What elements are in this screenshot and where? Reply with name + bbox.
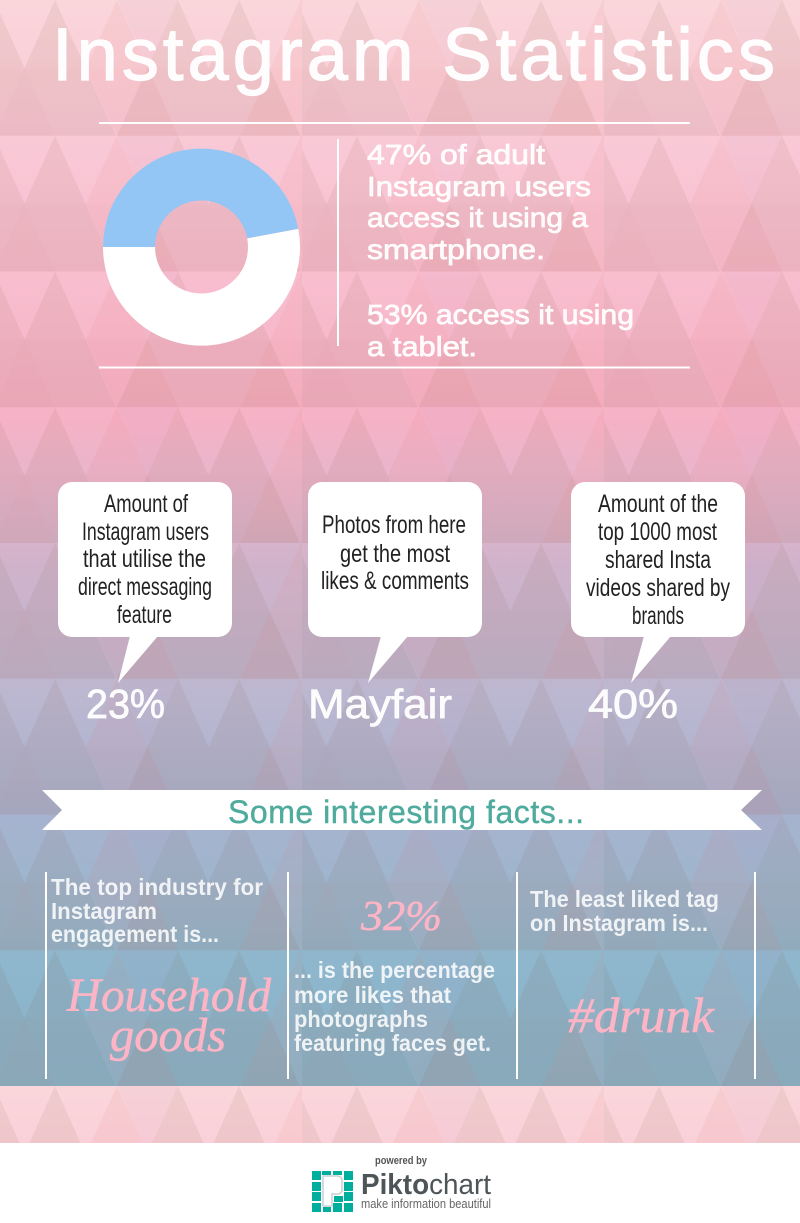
footer: powered by Piktochart: Piktochart (361, 1169, 491, 1201)
text: smartphone and tablet share: 53% access it using (367, 299, 634, 330)
callout: direct messaging 23%: feature (117, 601, 172, 629)
callout: direct messaging 23% (58, 482, 232, 727)
text: smartphone and tablet share: a tablet. (367, 331, 477, 362)
callout: brand videos 40%: Amount of the (598, 490, 718, 518)
text: smartphone and tablet share: Instagram users (367, 171, 591, 202)
callout: direct messaging 23%: Amount of (104, 490, 188, 518)
footer: powered by Piktochart: powered by (375, 1155, 428, 1167)
footer: powered by Piktochart: make information beautiful (361, 1197, 491, 1211)
panel: interesting facts (45, 872, 756, 1079)
title: Instagram Statistics (52, 13, 775, 96)
callout: Mayfair (308, 482, 482, 727)
callout: Mayfair: likes & comments (321, 567, 469, 595)
callout: Mayfair: Mayfair (308, 681, 452, 727)
panel: device usage (99, 122, 690, 368)
callout: brand videos 40%: shared Insta (605, 546, 711, 574)
callout: Mayfair: get the most (340, 540, 450, 568)
callout: direct messaging 23%: 23% (86, 681, 165, 727)
fact: faces get more likes: featuring faces get. (294, 1030, 491, 1056)
callout: brand videos 40%: videos shared by (586, 574, 730, 602)
text: smartphone and tablet share: 47% of adult (367, 139, 545, 170)
fact: top industry: engagement is... (51, 921, 219, 947)
text: smartphone and tablet share: access it using a (367, 202, 588, 233)
icon: Piktochart logo (312, 1171, 353, 1212)
fact: top industry (51, 874, 272, 1062)
callout: direct messaging 23%: direct messaging (78, 573, 212, 601)
background: pink bottom strip (0, 1086, 800, 1143)
fact: least liked tag (530, 886, 719, 1043)
fact: top industry: Instagram (51, 898, 157, 924)
callout: brand videos 40%: 40% (588, 681, 678, 727)
fact: least liked tag: on Instagram is... (530, 910, 708, 936)
callout: direct messaging 23%: Instagram users (82, 518, 209, 546)
banner: some interesting facts (42, 790, 762, 830)
callout: brand videos 40%: brands (632, 602, 684, 630)
fact: top industry: Household (66, 969, 272, 1022)
donut chart (103, 149, 300, 346)
fact: faces get more likes: 32% (360, 894, 442, 940)
banner: some interesting facts: Some interesting facts... (228, 794, 584, 830)
fact: faces get more likes: photographs (294, 1006, 428, 1032)
footer: powered by Piktochart (0, 1143, 800, 1223)
text: smartphone and tablet share: smartphone. (367, 234, 545, 265)
callout: Mayfair: Photos from here (322, 511, 466, 539)
callout: direct messaging 23%: that utilise the (83, 545, 206, 573)
fact: faces get more likes (294, 894, 495, 1056)
fact: faces get more likes: ... is the percentage (294, 957, 495, 983)
fact: faces get more likes: more likes that (294, 982, 451, 1008)
fact: least liked tag: The least liked tag (530, 886, 719, 912)
fact: top industry: The top industry for (51, 874, 263, 900)
fact: top industry: goods (110, 1009, 226, 1062)
callout: brand videos 40%: top 1000 most (598, 518, 717, 546)
text: smartphone and tablet share (367, 139, 634, 362)
fact: least liked tag: #drunk (568, 987, 715, 1043)
callout: brand videos 40% (571, 482, 745, 727)
